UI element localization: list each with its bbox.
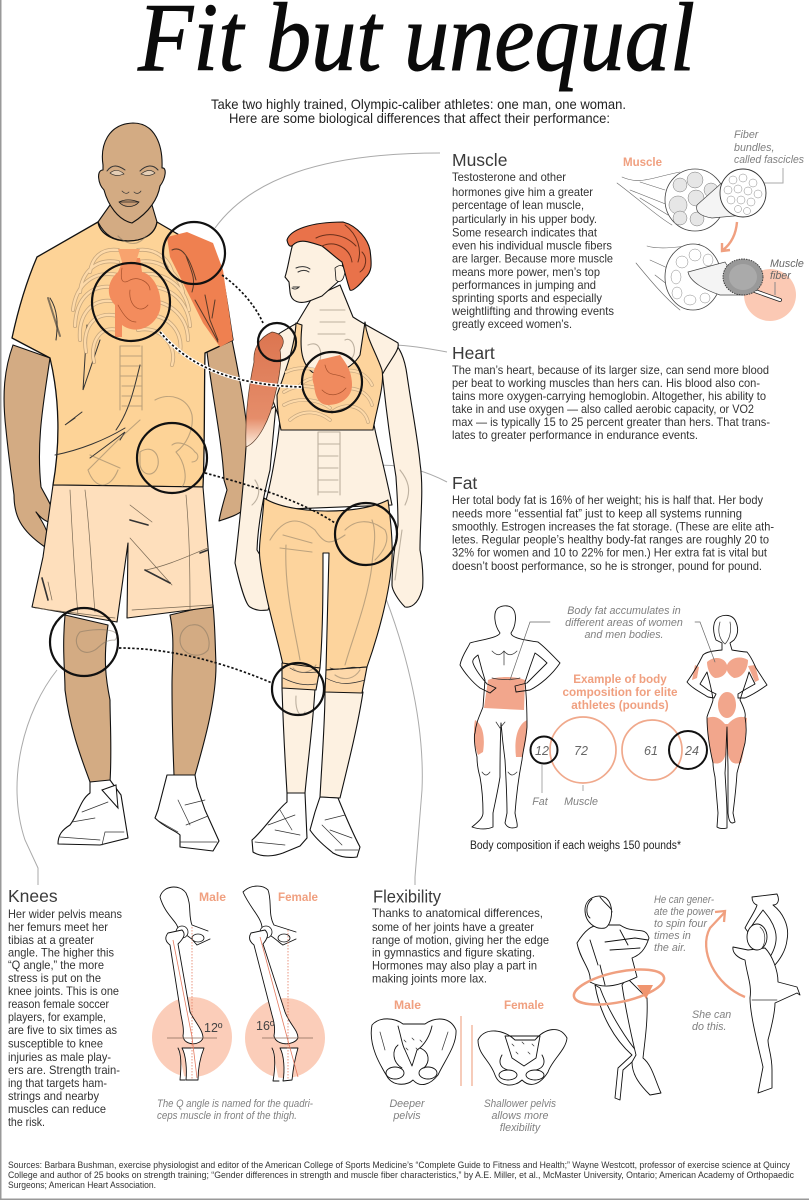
pelvis captions: flexibility [500, 1122, 541, 1134]
male female labels: Male [199, 891, 227, 904]
male pelvis [371, 1019, 456, 1085]
intro text: Take two highly trained, Olympic-caliber athletes: one man, one woman. [211, 96, 626, 112]
fat note [565, 605, 683, 641]
composition heading: Example of body [573, 673, 667, 686]
panel: heart text: per beat to working muscles than hers can. His blood also con- [452, 376, 760, 390]
woman skeleton overlay [252, 310, 409, 715]
fat note: Body fat accumulates in [567, 605, 681, 617]
male female labels: Female [278, 891, 318, 904]
illustration: man [4, 123, 251, 851]
woman left shoe [252, 793, 307, 856]
composition legend: Fat [532, 796, 549, 808]
panel: muscle text: Some research indicates that [452, 226, 598, 240]
panel: fat text: Her total body fat is 16% of her weight; his is half that. Her body [452, 493, 763, 507]
panel: fat text: letes. Regular people’s healthy body-fat ranges are roughly 20 to [452, 532, 769, 546]
fascicle caption: bundles, [734, 142, 774, 154]
man shirt [12, 222, 233, 487]
male composition circles: 12 [535, 744, 549, 758]
pelvis captions [389, 1098, 557, 1134]
panel: knees text: “Q angle,” the more [8, 958, 104, 972]
muscle fiber caption [770, 258, 804, 282]
panel: knees text: ing that targets ham- [8, 1076, 107, 1090]
woman neck and face [285, 232, 345, 302]
panel: knees text: strings and nearby [8, 1089, 99, 1103]
panel: knees text: angle. The higher this [8, 946, 114, 960]
panel: knees text: injuries as male play- [8, 1050, 111, 1064]
male composition circles: 72 [574, 744, 588, 758]
pelvis captions: allows more [491, 1110, 549, 1122]
panel: knees text: the risk. [8, 1115, 45, 1129]
composition legend [532, 764, 598, 808]
woman torso [256, 285, 398, 510]
man right shoe [155, 775, 219, 851]
panel: muscle text: Testosterone and other [452, 170, 566, 184]
panel: muscle text: Muscle [452, 150, 507, 170]
male skater body [577, 896, 661, 1100]
male composition circles [530, 717, 616, 783]
comparison rings with dotted connectors [50, 222, 397, 715]
panel: knees text: stress is put on the [8, 971, 101, 985]
panel: fat text: Fat [452, 473, 477, 493]
hip ring and connector [137, 423, 397, 565]
panel: fat text: doesn’t boost performance, so he is stronger, pound for pound. [452, 559, 762, 573]
man heart [109, 249, 161, 337]
pelvis labels: Male [394, 999, 422, 1012]
rotation arrow [706, 911, 745, 997]
man left arm and hand [4, 345, 56, 547]
panel: flexibility text: Flexibility [373, 886, 441, 906]
man arm muscle [167, 232, 233, 347]
panel: heart text: max — is typically 15 to 25 percent greater than hers. That trans- [452, 415, 770, 429]
panel: heart text [452, 343, 770, 442]
panel: muscle text: even his individual muscle fibers [452, 238, 612, 252]
woman right shoe [310, 797, 360, 858]
composition caption: Body composition if each weighs 150 pounds* [470, 840, 681, 852]
fascicle caption: Fiber [734, 129, 759, 141]
heart ring and connector [92, 263, 362, 412]
skater head [747, 924, 767, 950]
panel: knees text: knee joints. This is one [8, 984, 119, 998]
female leg bones [243, 886, 313, 1081]
woman lower legs [282, 688, 363, 798]
panel: knees text [8, 886, 122, 1129]
leader lines from circles to text [17, 153, 447, 885]
panel: knees text: ers are. Strength train- [8, 1063, 120, 1077]
top muscle bundle [617, 169, 766, 231]
skater captions: the air. [654, 942, 686, 954]
panel: flexibility text: in gymnastics and figure skating. [372, 946, 535, 960]
panel: flexibility text: Hormones may also play a part in [372, 958, 537, 972]
muscle fiber caption: Muscle [770, 258, 804, 270]
angle values [204, 1019, 275, 1035]
skater captions: He can gener- [654, 894, 714, 906]
composition legend: Muscle [564, 796, 598, 808]
male knee circle [152, 997, 232, 1077]
sources [8, 1160, 794, 1190]
sources: Surgeons; American Heart Association. [8, 1180, 156, 1190]
panel: muscle text: are larger. Because more muscle [452, 252, 613, 266]
fascicle caption: called fascicles [734, 154, 805, 166]
panel: muscle text: percentage of lean muscle, [452, 198, 584, 212]
muscle label: Muscle [623, 156, 662, 169]
bottom muscle bundle [636, 244, 780, 310]
panel: flexibility text: some of her joints have a greater [372, 920, 534, 934]
arrow between bundles [722, 222, 737, 251]
female body outline [687, 615, 767, 829]
skater captions: do this. [692, 1021, 726, 1033]
panel: heart text: The man’s heart, because of its larger size, can send more blood [452, 363, 769, 377]
panel: flexibility text: range of motion, giving her the edge [372, 933, 549, 947]
panel: muscle text: sprinting sports and especially [452, 291, 602, 305]
panel: knees text: reason female soccer [8, 997, 109, 1011]
woman arm muscle [246, 332, 283, 447]
panel: knees text: Knees [8, 886, 58, 906]
composition heading: composition for elite [563, 686, 678, 699]
diagram: pelvis comparison [371, 999, 567, 1134]
skater body and standing leg [733, 947, 800, 1093]
panel: muscle text: performances in jumping and [452, 278, 596, 292]
pelvis captions: pelvis [392, 1110, 421, 1122]
shoulder ring and connector [163, 222, 296, 361]
knee ring and connector [50, 608, 324, 715]
skater captions: to spin four [654, 918, 707, 930]
skater captions: She can [692, 1009, 731, 1021]
panel: heart text: lates to greater performance in endurance events. [452, 428, 698, 442]
panel: muscle text: weightlifting and throwing events [451, 304, 614, 318]
illustration: male skater [571, 896, 667, 1100]
woman hair [287, 222, 371, 290]
spin arrowhead [637, 985, 653, 999]
composition heading: athletes (pounds) [571, 699, 669, 712]
female pelvis [478, 1030, 567, 1085]
woman sports bra [277, 322, 383, 430]
panel: knees text: susceptible to knee [8, 1036, 103, 1050]
male female labels [199, 891, 318, 904]
woman heart [313, 355, 352, 405]
female composition circles: 61 [644, 744, 658, 758]
skater captions [654, 894, 731, 1033]
man right arm and hand [207, 340, 251, 521]
composition heading [563, 673, 678, 712]
man head [99, 123, 165, 223]
panel: fat text: needs more “essential fat” just to keep all systems running [452, 506, 742, 520]
Q angle caption: The Q angle is named for the quadri- [157, 1098, 313, 1110]
panel: fat text: smoothly. Estrogen increases the fat storage. (These are elite ath- [452, 520, 774, 534]
panel: muscle text: hormones give him a greater [452, 185, 593, 199]
skater captions: ate the power [654, 906, 714, 918]
woman left forearm and hand [235, 405, 276, 610]
panel: knees text: are five to six times as [8, 1023, 117, 1037]
man neck [98, 205, 157, 241]
panel: muscle text: particularly in his upper body. [452, 212, 597, 226]
man shirt folds [48, 298, 140, 458]
panel: heart text: tains more oxygen-carrying hemoglobin. Altogether, his ability to [452, 389, 766, 403]
man left shoe [58, 780, 128, 845]
man shorts [32, 485, 213, 622]
female knee circle [245, 998, 325, 1078]
pelvis captions: Deeper [389, 1098, 425, 1110]
panel: fat text [452, 473, 774, 573]
diagram: muscle fibers [617, 129, 805, 321]
panel: muscle text: means more power, men’s top [452, 265, 600, 279]
raised leg and arms [745, 894, 788, 967]
intro text [211, 96, 626, 126]
panel: heart text: take in and use oxygen — also called aerobic capacity, or VO2 [452, 402, 754, 416]
pelvis labels [394, 999, 544, 1012]
angle values: 16º [256, 1019, 275, 1033]
muscle fiber caption: fiber [770, 270, 791, 282]
panel: knees text: her femurs meet her [8, 920, 108, 934]
panel: muscle text [451, 150, 614, 331]
panel: flexibility text: Thanks to anatomical differences, [372, 906, 543, 920]
angle values: 12º [204, 1021, 223, 1035]
panel: knees text: muscles can reduce [8, 1102, 106, 1116]
panel: flexibility text [372, 886, 549, 986]
male leg bones [160, 887, 217, 1080]
man skeleton overlay [73, 236, 209, 655]
intro text: Here are some biological differences that affect their performance: [229, 110, 610, 126]
chart: body fat distribution and composition [460, 605, 767, 852]
illustration: woman [235, 222, 423, 858]
female composition circles [622, 720, 707, 780]
panel: knees text: players, for example, [8, 1010, 106, 1024]
fat note: and men bodies. [584, 629, 664, 641]
female composition circles: 24 [684, 744, 699, 758]
panel: knees text: Her wider pelvis means [8, 907, 122, 921]
skater captions: times in [654, 930, 691, 942]
Q angle caption: ceps muscle in front of the thigh. [157, 1110, 297, 1122]
diagram: Q angle [152, 886, 325, 1122]
woman leggings [259, 498, 392, 693]
panel: fat text: 32% for women and 10 to 22% for men.) Her extra fat is vital but [452, 546, 768, 560]
fat note: different areas of women [565, 617, 683, 629]
muscle fiber pink circle [744, 269, 796, 321]
pelvis labels: Female [504, 999, 544, 1012]
panel: flexibility text: making joints more lax. [372, 972, 487, 986]
pelvis captions: Shallower pelvis [484, 1098, 557, 1110]
panel: muscle text: greatly exceed women’s. [452, 317, 572, 331]
fascicle caption [734, 129, 805, 166]
panel: knees text: tibias at a greater [8, 933, 94, 947]
illustration: female skater [733, 894, 800, 1093]
woman right arm and hand [382, 340, 423, 607]
panel: heart text: Heart [452, 343, 495, 363]
spin ring [571, 963, 667, 1011]
male body outline [460, 606, 560, 829]
pelvis depth arrows [461, 1016, 472, 1086]
man legs [64, 605, 216, 782]
Q angle caption [157, 1098, 313, 1122]
